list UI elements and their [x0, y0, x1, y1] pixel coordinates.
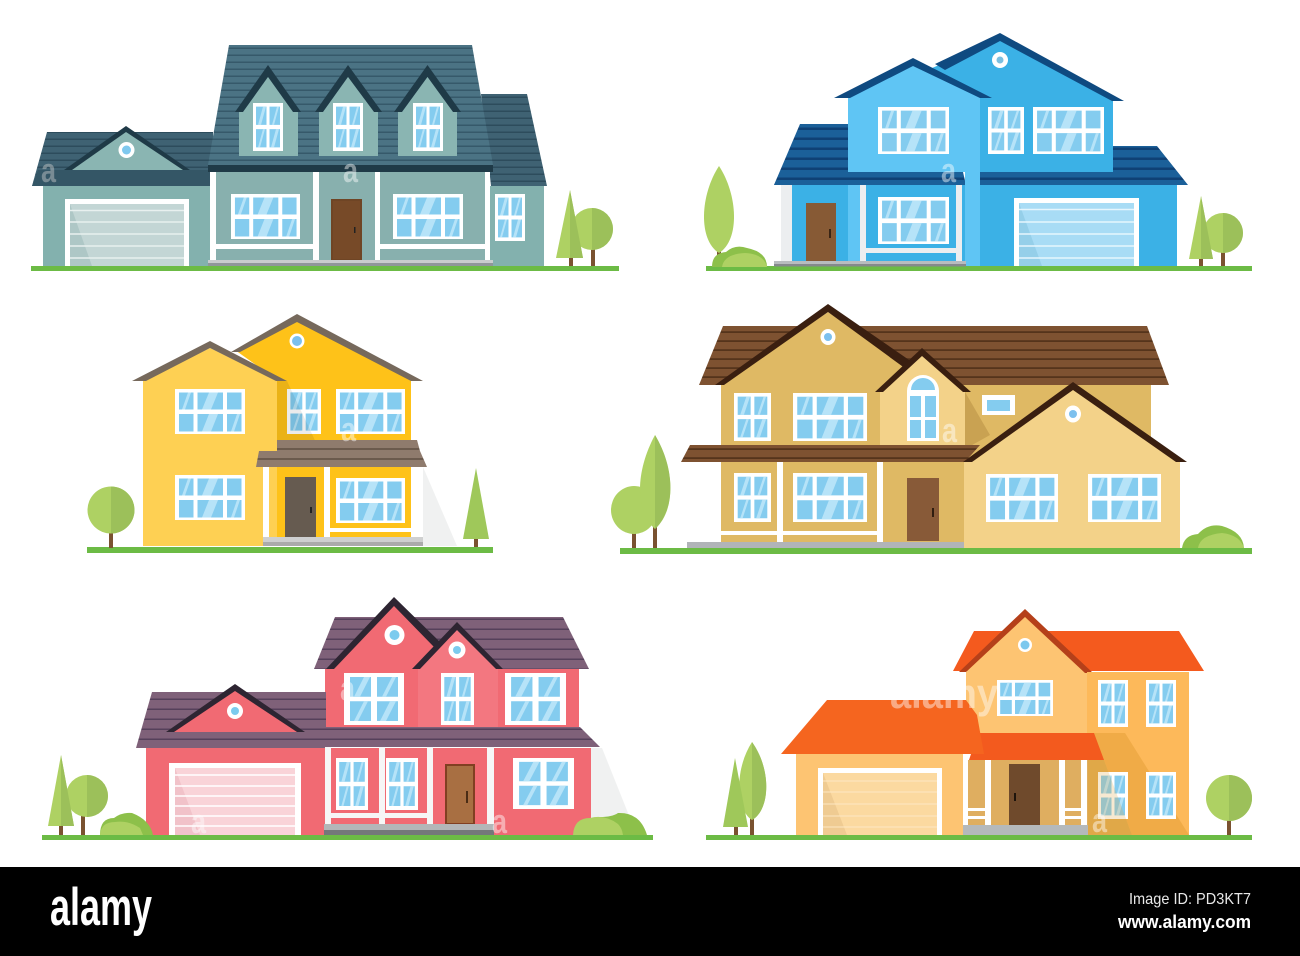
left trees [611, 435, 670, 548]
porch step [963, 825, 1088, 835]
watermark [41, 152, 1108, 841]
watermark: a [1092, 802, 1108, 840]
website: www.alamy.com [1117, 912, 1251, 932]
door [806, 203, 836, 261]
lower wall [721, 462, 964, 544]
left gable [721, 312, 916, 450]
back wall [721, 385, 1151, 462]
big upper body [932, 40, 1113, 172]
big gable [327, 603, 437, 669]
round tree [1206, 775, 1252, 835]
big upper body [235, 320, 411, 440]
right bush [573, 813, 647, 835]
watermark: a [343, 152, 359, 190]
porch step [324, 824, 494, 835]
garage door [1014, 198, 1139, 266]
trees [556, 190, 613, 266]
small window [982, 395, 1015, 415]
big gable roof [326, 597, 440, 669]
porch posts and rail [693, 462, 883, 542]
garage gable [166, 684, 305, 732]
dormer 1 [235, 65, 301, 156]
watermark: a [340, 670, 356, 708]
door [331, 199, 362, 260]
garage door [65, 199, 189, 266]
left trees [48, 755, 108, 835]
watermark: a [341, 411, 357, 449]
back roof [699, 326, 1169, 385]
right gable wing [963, 382, 1187, 548]
house: tan large house [611, 304, 1252, 554]
door [445, 764, 475, 824]
porch posts and rail [325, 747, 494, 825]
tower corner shade [1088, 760, 1132, 835]
house: yellow two-storey house [87, 314, 493, 553]
side shadow [423, 467, 457, 546]
porch posts and rails [210, 172, 490, 262]
dormer 3 [394, 65, 461, 156]
garage wall [796, 754, 963, 835]
big roof [935, 33, 1124, 101]
main roof [208, 45, 493, 165]
house: orange house with garage [706, 609, 1252, 840]
small gable [412, 622, 503, 669]
round window [290, 334, 304, 348]
garage roof [781, 700, 984, 754]
watermark: alamy [890, 670, 999, 717]
footer bar [0, 867, 1300, 956]
ground [706, 266, 1252, 271]
upper windows [878, 107, 1104, 244]
side shadow [591, 748, 630, 818]
tower wall [1087, 672, 1189, 835]
front upper body [848, 65, 980, 172]
porch wall [210, 172, 490, 262]
upper windows [344, 673, 566, 725]
upper window [997, 680, 1053, 716]
porch roof [320, 727, 600, 747]
garage roof [32, 132, 213, 186]
left trees [723, 742, 766, 835]
pointed tree [463, 468, 489, 547]
watermark: a [942, 412, 958, 450]
logo: alamy [50, 878, 152, 937]
porch roof [969, 733, 1104, 760]
upper wall [325, 669, 579, 729]
lower wall [792, 155, 1177, 266]
tower shadow [1087, 733, 1189, 835]
house: coral house with garage [42, 597, 653, 840]
left cypress and bush [704, 166, 767, 267]
watermark: a [191, 803, 207, 841]
left gable roof [715, 304, 912, 385]
dormer shadow [965, 392, 990, 449]
right wing wall [490, 186, 544, 266]
lower wall [146, 748, 591, 835]
lower windows [734, 473, 867, 522]
big roof [231, 314, 423, 381]
right roof [980, 146, 1188, 185]
door [907, 478, 939, 541]
right trees [1189, 196, 1243, 266]
porch posts and rail [781, 185, 962, 262]
garage door [169, 763, 301, 835]
garage door [818, 768, 942, 835]
upper roof [314, 617, 589, 669]
ground [31, 266, 619, 271]
house: teal suburban house with dormers [31, 45, 619, 271]
round window [1018, 638, 1032, 652]
right wing window [495, 194, 525, 241]
watermark: a [492, 803, 508, 841]
front roof [834, 58, 992, 98]
round window [992, 52, 1008, 68]
right back roof [481, 94, 547, 186]
tower lower-left window [1098, 772, 1128, 819]
porch posts and rail [263, 467, 423, 538]
left roof [132, 341, 287, 381]
porch step [774, 261, 966, 266]
ground [706, 835, 1252, 840]
porch posts and rails [963, 754, 1087, 825]
round windows [384, 625, 466, 658]
round tree [88, 486, 134, 548]
gable roof edge [959, 609, 1093, 673]
house: blue two-storey house [704, 33, 1252, 271]
door [1009, 764, 1040, 825]
garage roof [136, 692, 326, 748]
dormer 2 [315, 65, 382, 156]
porch roof [774, 172, 966, 185]
porch step [263, 537, 424, 546]
watermark: a [941, 152, 957, 190]
upper windows [734, 393, 867, 441]
roof eave [208, 165, 493, 172]
tower windows [1098, 680, 1176, 819]
round window [820, 329, 836, 345]
left bush [100, 813, 153, 835]
lower porch wall [263, 467, 411, 545]
ground [87, 547, 493, 553]
garage roof lower band [32, 170, 213, 186]
gable wall [966, 616, 1088, 735]
ground [42, 835, 653, 840]
garage wall [43, 186, 211, 266]
garage gable [64, 126, 190, 170]
ground [620, 548, 1252, 554]
porch roof [256, 440, 427, 467]
porch roof [681, 445, 980, 462]
cast shadow [277, 381, 320, 451]
porch step [687, 542, 964, 548]
porch windows [231, 194, 463, 239]
lower windows [336, 758, 574, 810]
top roof [953, 631, 1204, 671]
porch step [208, 260, 493, 266]
windows [175, 389, 405, 523]
door [285, 477, 316, 537]
watermark: a [41, 152, 57, 190]
image id: Image ID: PD3KT7 [1129, 891, 1251, 908]
left body [143, 348, 277, 546]
left roof [774, 124, 850, 185]
center dormer [875, 348, 971, 448]
bush [1182, 525, 1244, 548]
porch wall [963, 760, 1088, 826]
